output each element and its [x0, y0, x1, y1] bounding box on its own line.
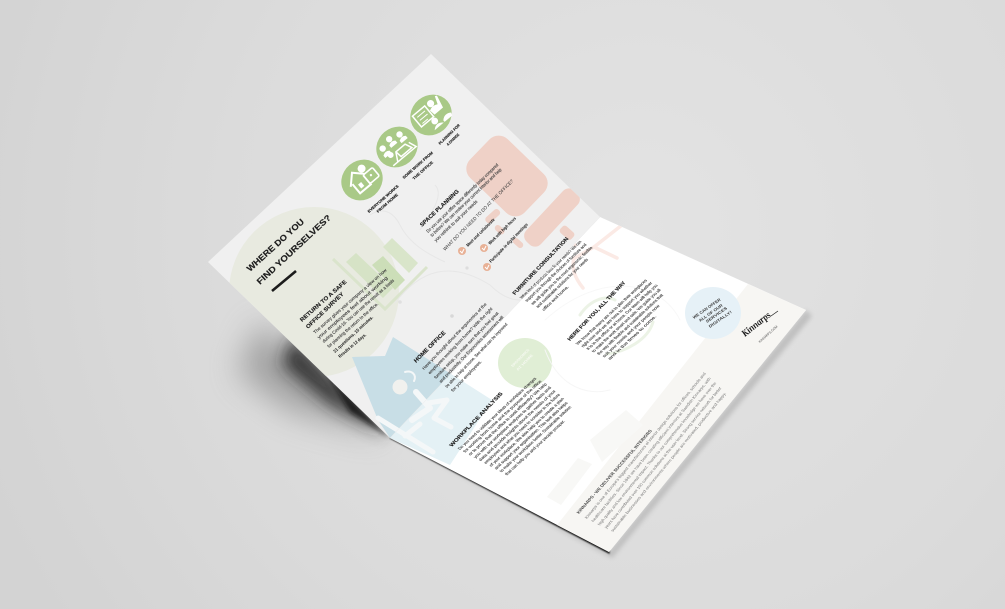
- text block: workplace analysis: WORKPLACE ANALYSIS: [449, 391, 505, 448]
- text block: here for you: HERE FOR YOU, ALL THE WAY: [567, 280, 628, 342]
- faint contour lines: [370, 185, 520, 318]
- illustration: red chair on left page: [466, 136, 580, 248]
- text block: here for you: suit your needs and your people now: [601, 303, 662, 358]
- icon labels: SOME WORK FROM: [402, 151, 434, 180]
- text block: home office: Have you thought about the ergonomics of the: [421, 302, 488, 371]
- text block: space planning: to before? We can review your current interior and help: [429, 167, 503, 238]
- text block: workplace analysis: you with our workplace analyses to gather facts and: [472, 385, 553, 459]
- text block: space planning: Do you use your office space differently today compared: [425, 162, 500, 234]
- text block: home office: and productivity. Our Ergonomics assessment will: [438, 315, 505, 384]
- logo: KINNARPS.COM: [758, 325, 779, 344]
- text block: workplace analysis: [449, 376, 573, 476]
- circle text: DIGITALLY!: [708, 309, 733, 329]
- text block: return to a safe office survey: for planning the return to the office.: [326, 302, 379, 349]
- checklist: Work with high focus: [487, 216, 517, 246]
- text block: return to a safe office survey: during Covid-19. You can use the result as a basis: [321, 278, 396, 344]
- icon labels: EVERYONE WORKS: [367, 184, 400, 214]
- shadow under right page: [390, 310, 812, 558]
- text block: here for you: We know that many are out to plan their workplaces: [575, 278, 649, 345]
- icon labels: A CHANGE: [446, 133, 460, 147]
- title: FIND YOURSELVES?: [255, 213, 333, 286]
- text block: workplace analysis: that can help you and your people prosper.: [504, 419, 566, 476]
- icon: planning for a change: [402, 86, 460, 144]
- text block: space planning: WHAT DO YOU NEED TO DO AT THE OFFICE?: [442, 178, 515, 252]
- text block: here for you: to make the work smart and safe. We guide you all: [590, 288, 662, 353]
- chart icon: green bars: [333, 238, 427, 309]
- text block: workplace analysis: for working from home and the purpose of the office: [462, 379, 543, 453]
- checklist: Participate in digital meetings: [488, 222, 529, 264]
- text block: about kinnarps: sustainable businesses and environments where people are motivated, productive and happy.: [610, 392, 727, 532]
- text block: return to a safe office survey: OFFICE SURVEY: [305, 291, 346, 330]
- text block: return to a safe office survey: The survey gives your company a view on how: [312, 267, 388, 335]
- illustration: red chair base on right page: [571, 226, 622, 290]
- icon: some work from the office: [368, 118, 426, 176]
- text block: furniture consultation: support you through the choices of furniture and: [524, 242, 588, 303]
- checklist: Meet and collaborate: [465, 217, 496, 248]
- icon: everyone works from home: [333, 151, 391, 209]
- green circle callout: [498, 338, 552, 388]
- text block: return to a safe office survey: RETURN TO A SAFE: [299, 279, 349, 323]
- text block: workplace analysis: employees and what you need to consider in the future: [483, 392, 562, 464]
- text block: return to a safe office survey: [299, 267, 396, 359]
- icon labels: PLANNING FOR: [438, 123, 461, 146]
- faint green arc behind Here for you: [545, 286, 680, 392]
- panel: footer strip: [557, 284, 806, 552]
- shadow under left page: [238, 322, 390, 438]
- panel: right page: [390, 217, 806, 552]
- text block: home office: [413, 302, 509, 393]
- text block: home office: employees working from home? With the right: [427, 306, 494, 375]
- circle text: ALL OF OUR: [698, 303, 724, 323]
- icon: person at desk: [378, 372, 451, 452]
- text block: furniture consultation: office and home.: [541, 285, 570, 312]
- title: WHERE DO YOU: [245, 217, 306, 273]
- checklist: [458, 216, 529, 271]
- icon labels: THE OFFICE: [412, 160, 435, 181]
- text block: furniture consultation: What kind of products best fit your needs? We can: [519, 239, 583, 300]
- text block: home office: for your employees.: [450, 359, 483, 393]
- text block: home office: furniture setup, you make sure that you feel great: [433, 310, 500, 380]
- circle text: [692, 297, 733, 329]
- circle text: WE CAN OFFER: [692, 297, 722, 320]
- text block: about kinnarps: years have contributed over 100 common solutions at the user level. Strong service network for better: [603, 386, 723, 529]
- faint furniture illustration: [547, 410, 643, 505]
- green circle callout: ERGONOMICS: [510, 348, 531, 367]
- icon labels: [367, 123, 461, 214]
- text block: space planning: SPACE PLANNING: [419, 189, 461, 228]
- text block: workplace analysis: and support your organisation. This tool also helps: [493, 401, 569, 470]
- text block: furniture consultation: we will guide you to the most ergonomic, flexible: [530, 245, 594, 306]
- text block: here for you: the way with flexible and sustainable solutions that: [596, 293, 665, 355]
- icon labels: FROM HOME: [376, 193, 399, 214]
- text block: here for you: and in the times to come.: [607, 315, 658, 360]
- text block: workplace analysis: Do you need to validate your ideas of workplace changes: [457, 376, 538, 450]
- text block: about kinnarps: Kinnarps is one of Europe's biggest manufacturers of interior design solutions for offices, schools and: [584, 371, 707, 519]
- crease shading: [390, 217, 600, 438]
- text block: here for you: it is in the office or at home. Our team will help you: [585, 283, 659, 350]
- text block: return to a safe office survey: Results in 12 days.: [337, 332, 367, 359]
- text block: about kinnarps: healthcare facilities. Since 1942 we have been creating efficient interiors at Swedish Kinnarps, with: [590, 376, 713, 523]
- title underline: [272, 271, 296, 291]
- green circle callout: AT HOME: [515, 354, 535, 371]
- text block: about kinnarps: high quality and low environmental impact. Thanks to our comprehensive knowledge we have over the: [597, 381, 718, 526]
- text block: here for you: [567, 278, 665, 360]
- text block: about kinnarps: KINNARPS - WE DELIVER SUCCESSFUL INTERIORS: [576, 429, 653, 514]
- title: [245, 213, 333, 286]
- text block: furniture consultation: FURNITURE CONSULTATION: [512, 237, 571, 296]
- text block: workplace analysis: data and provide insights about the needs of your: [477, 389, 557, 462]
- text block: home office: HOME OFFICE: [413, 330, 447, 364]
- circle text: SERVICES: [705, 305, 728, 324]
- logo: Kinnarps: [739, 310, 774, 340]
- text block: workplace analysis: of your workplace. We also help you to create a plan: [488, 397, 565, 467]
- panel: left page: [208, 54, 600, 438]
- text block: here for you: right now and we are here to support you whether: [580, 281, 654, 348]
- text block: return to a safe office survey: your employees feel about working: [316, 275, 389, 340]
- text block: return to a safe office survey: 21 questions, 15 minutes.: [332, 315, 374, 354]
- decorative circle behind survey: [229, 207, 399, 377]
- text block: furniture consultation: and sustainable solutions for your needs: [535, 257, 590, 309]
- illustration: blue house: [352, 337, 492, 465]
- text block: workplace analysis: or to prove that the office is used efficiently? We help: [467, 382, 548, 456]
- text block: workplace analysis: to make your workplace better. Sustainable solution: [498, 405, 573, 473]
- text block: space planning: [419, 162, 529, 271]
- text block: home office: be able to help at home. See what can be improved: [444, 322, 509, 389]
- blue circle: digital services: [685, 287, 741, 339]
- text block: space planning: you rethink to suit your needs: [433, 199, 479, 243]
